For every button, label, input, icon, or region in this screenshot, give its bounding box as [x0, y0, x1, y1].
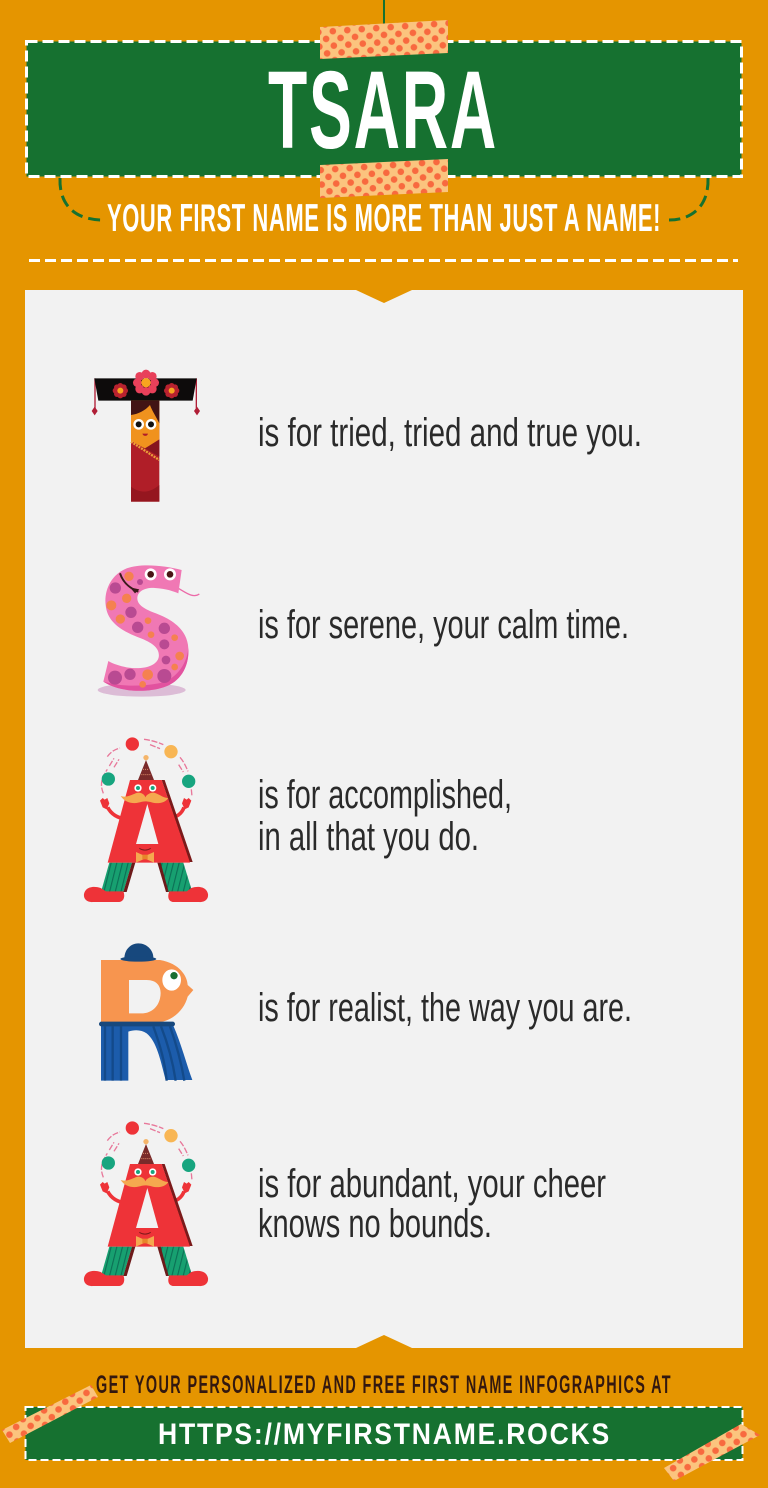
text: second A lines: is for abundant, your cheer: [258, 1162, 606, 1206]
tape: footer right: [664, 1424, 760, 1481]
top hanging line: [383, 0, 385, 24]
icon: letter A second: [84, 1121, 208, 1286]
panel: letters: [25, 290, 743, 1348]
tape: footer left: [2, 1385, 98, 1443]
text: first A lines: is for accomplished,: [258, 773, 512, 817]
icon: letter A: [84, 737, 208, 902]
text: T line: is for tried, tried and true you.: [258, 411, 642, 455]
icon: letter T: [92, 370, 200, 502]
connector left: [60, 178, 103, 220]
text: S line: is for serene, your calm time.: [258, 603, 629, 647]
title: TSARA: [268, 49, 498, 172]
text: first A lines: [258, 773, 512, 859]
text: R line: is for realist, the way you are.: [258, 986, 632, 1030]
text: first A lines: in all that you do.: [258, 815, 479, 859]
icon: letter S: [98, 565, 199, 697]
footer banner: [26, 1407, 742, 1460]
URL: HTTPS://MYFIRSTNAME.ROCKS: [158, 1418, 611, 1451]
title banner: [26, 20, 742, 198]
connector right: [669, 178, 708, 220]
icon: letter R: [99, 943, 193, 1081]
tape: top: [320, 20, 448, 59]
text: second A lines: knows no bounds.: [258, 1202, 492, 1246]
text: second A lines: [258, 1162, 606, 1246]
tape: bottom: [320, 159, 448, 198]
